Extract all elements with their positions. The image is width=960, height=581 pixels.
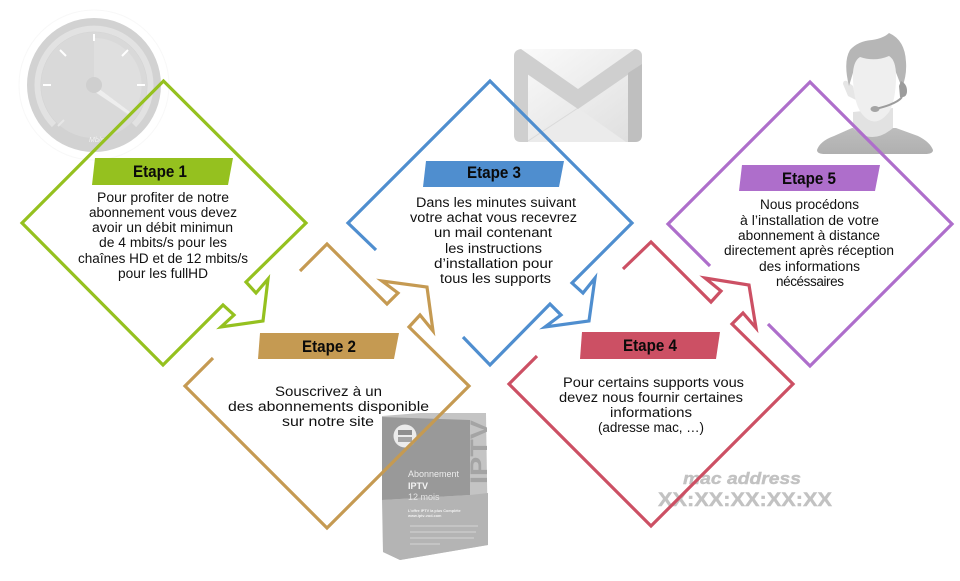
text: mac address: XX:XX:XX:XX:XX <box>658 490 832 511</box>
banner: etape 5 <box>739 165 880 191</box>
heading: etape 2: Etape 2 <box>302 337 356 356</box>
banner: etape 3 <box>423 161 564 187</box>
heading: etape 3: Etape 3 <box>467 163 521 182</box>
text: etape 1 body <box>78 190 248 281</box>
icon: IPTV product box: L'offre IPTV la plus Complète <box>408 509 461 513</box>
icon: IPTV product box: www.iptv-vod.com <box>407 514 442 518</box>
text: etape 2 body: des abonnements disponible <box>228 399 429 414</box>
text: etape 1 body: abonnement vous devez <box>89 205 237 220</box>
icon: IPTV product box: IPTV <box>408 481 428 491</box>
diamond arrow outline: etape 3 <box>348 81 632 365</box>
text: etape 3 body <box>410 195 577 286</box>
icon: IPTV product box: 12 mois <box>408 492 440 502</box>
icon: support agent with headset <box>817 33 933 154</box>
text: etape 5 body: des informations <box>759 259 860 274</box>
heading: etape 1: Etape 1 <box>133 162 187 181</box>
banner: etape 4 <box>580 332 720 359</box>
heading: etape 4: Etape 4 <box>623 336 677 355</box>
text: etape 3 body: Dans les minutes suivant <box>416 195 576 210</box>
icon: speedometer: Mb/s <box>89 137 105 144</box>
text: etape 3 body: tous les supports <box>440 271 551 286</box>
panel: etape 4 <box>509 242 793 526</box>
diamond arrow outline: etape 2 <box>185 244 469 528</box>
panel: etape 1 <box>22 81 306 365</box>
icon: IPTV product box: IPTV <box>465 420 492 484</box>
text: etape 5 body <box>724 197 894 289</box>
text: etape 1 body: de 4 mbits/s pour les <box>99 235 227 250</box>
text: etape 1 body: pour les fullHD <box>118 266 208 281</box>
panel: etape 3 <box>348 81 632 365</box>
text: etape 5 body: abonnement à distance <box>738 228 880 243</box>
icon: speedometer <box>19 10 169 160</box>
text: etape 1 body: avoir un débit minimun <box>92 220 233 235</box>
text: etape 4 body <box>559 375 744 435</box>
text: etape 1 body: Pour profiter de notre <box>97 190 229 205</box>
text: etape 5 body: à l’installation de votre <box>740 213 879 228</box>
text: etape 5 body: nécéssaires <box>776 274 844 289</box>
icon: mail envelope <box>514 49 642 142</box>
text: etape 4 body: informations <box>610 405 692 420</box>
text: etape 2 body <box>228 384 429 429</box>
icon: IPTV product box: Abonnement <box>408 469 460 479</box>
heading: etape 5: Etape 5 <box>782 169 836 188</box>
banner: etape 1 <box>92 158 233 185</box>
text: etape 2 body: sur notre site <box>282 414 374 429</box>
text: etape 4 body: devez nous fournir certaines <box>559 390 743 405</box>
text: etape 5 body: Nous procédons <box>760 197 859 212</box>
text: mac address <box>658 469 832 511</box>
panel: etape 5 <box>668 82 952 366</box>
text: etape 3 body: un mail contenant <box>434 225 552 240</box>
text: etape 3 body: d’installation pour <box>434 256 554 271</box>
panel: etape 2 <box>185 244 469 528</box>
text: etape 5 body: directement après réception <box>724 243 894 258</box>
text: etape 3 body: votre achat vous recevrez <box>410 210 577 225</box>
text: etape 4 body: (adresse mac, …) <box>598 420 704 435</box>
text: etape 4 body: Pour certains supports vous <box>563 375 744 390</box>
icon: IPTV product box <box>382 413 492 560</box>
diamond outline: etape 5 <box>668 82 952 366</box>
text: etape 3 body: les instructions <box>445 241 542 256</box>
text: etape 2 body: Souscrivez à un <box>275 384 382 399</box>
text: etape 1 body: chaînes HD et de 12 mbits/s <box>78 251 248 266</box>
diamond arrow outline: etape 4 <box>509 242 793 526</box>
diamond arrow outline: etape 1 <box>22 81 306 365</box>
banner: etape 2 <box>258 333 399 359</box>
text: mac address: mac address <box>683 469 801 488</box>
